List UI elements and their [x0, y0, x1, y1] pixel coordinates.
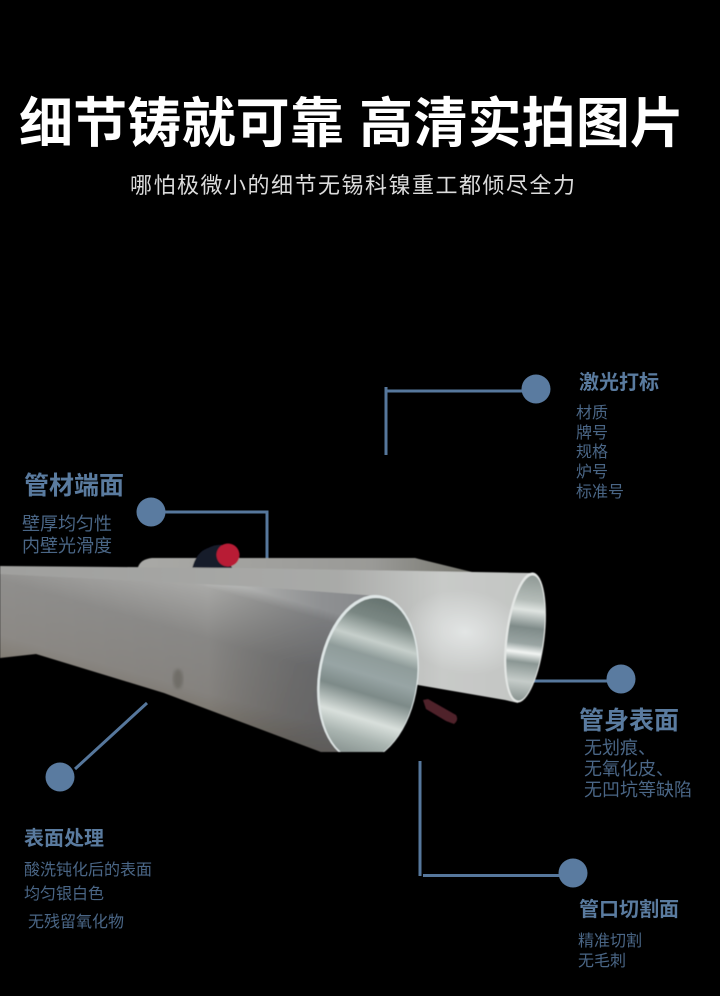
middle pipe body — [0, 566, 532, 703]
label: pipe body surface: 无氧化皮、 — [584, 759, 674, 779]
dot: cut face — [558, 858, 588, 888]
dot: surface treatment — [46, 762, 74, 792]
label: cut face: 管口切割面 — [579, 898, 679, 921]
label: cut face — [578, 898, 679, 970]
label: pipe body surface: 无凹坑等缺陷 — [584, 780, 692, 800]
label: surface treatment: 表面处理 — [24, 827, 104, 850]
label: pipe end face — [22, 472, 124, 556]
connector: pipe body surface — [530, 680, 612, 682]
title: 细节铸就可靠 高清实拍图片 — [19, 94, 684, 154]
dot: pipe end face — [136, 498, 166, 526]
connector: cut face — [420, 761, 565, 876]
weld mark — [173, 669, 183, 689]
dot: pipe body surface — [606, 664, 636, 694]
label: cut face: 无毛刺 — [578, 952, 626, 970]
label: pipe end face: 内壁光滑度 — [22, 536, 112, 556]
label: surface treatment: 无残留氧化物 — [28, 913, 124, 931]
label: laser marking: 牌号 — [576, 424, 608, 442]
dot: laser marking — [522, 374, 550, 404]
label: laser marking: 炉号 — [576, 463, 608, 481]
label: surface treatment: 酸洗钝化后的表面 — [24, 861, 152, 879]
label: surface treatment — [24, 827, 152, 931]
far pipe — [138, 558, 472, 572]
label: pipe body surface — [579, 707, 692, 800]
label: laser marking: 标准号 — [576, 483, 624, 501]
subtitle: 哪怕极微小的细节无锡科镍重工都倾尽全力 — [130, 173, 575, 198]
label: laser marking: 材质 — [576, 404, 608, 422]
label: pipe end face: 壁厚均匀性 — [22, 514, 112, 534]
connector: surface treatment — [75, 703, 147, 769]
label: pipe end face: 管材端面 — [24, 472, 124, 500]
label: cut face: 精准切割 — [578, 932, 642, 950]
middle pipe highlight — [398, 582, 532, 682]
connector: pipe end face — [160, 512, 267, 560]
connector: laser marking — [386, 387, 525, 455]
label: pipe body surface: 管身表面 — [579, 707, 679, 735]
label: laser marking: 激光打标 — [579, 371, 659, 394]
label: pipe body surface: 无划痕、 — [584, 738, 656, 758]
middle pipe mouth — [498, 570, 552, 705]
label: laser marking: 规格 — [576, 443, 608, 461]
small red fragment — [423, 699, 457, 724]
label: surface treatment: 均匀银白色 — [24, 885, 104, 903]
steel pipes photo — [0, 544, 552, 768]
front pipe body — [0, 574, 378, 752]
label: laser marking — [576, 371, 659, 501]
front pipe mouth — [316, 594, 420, 753]
red cap with dark plug — [192, 544, 240, 569]
